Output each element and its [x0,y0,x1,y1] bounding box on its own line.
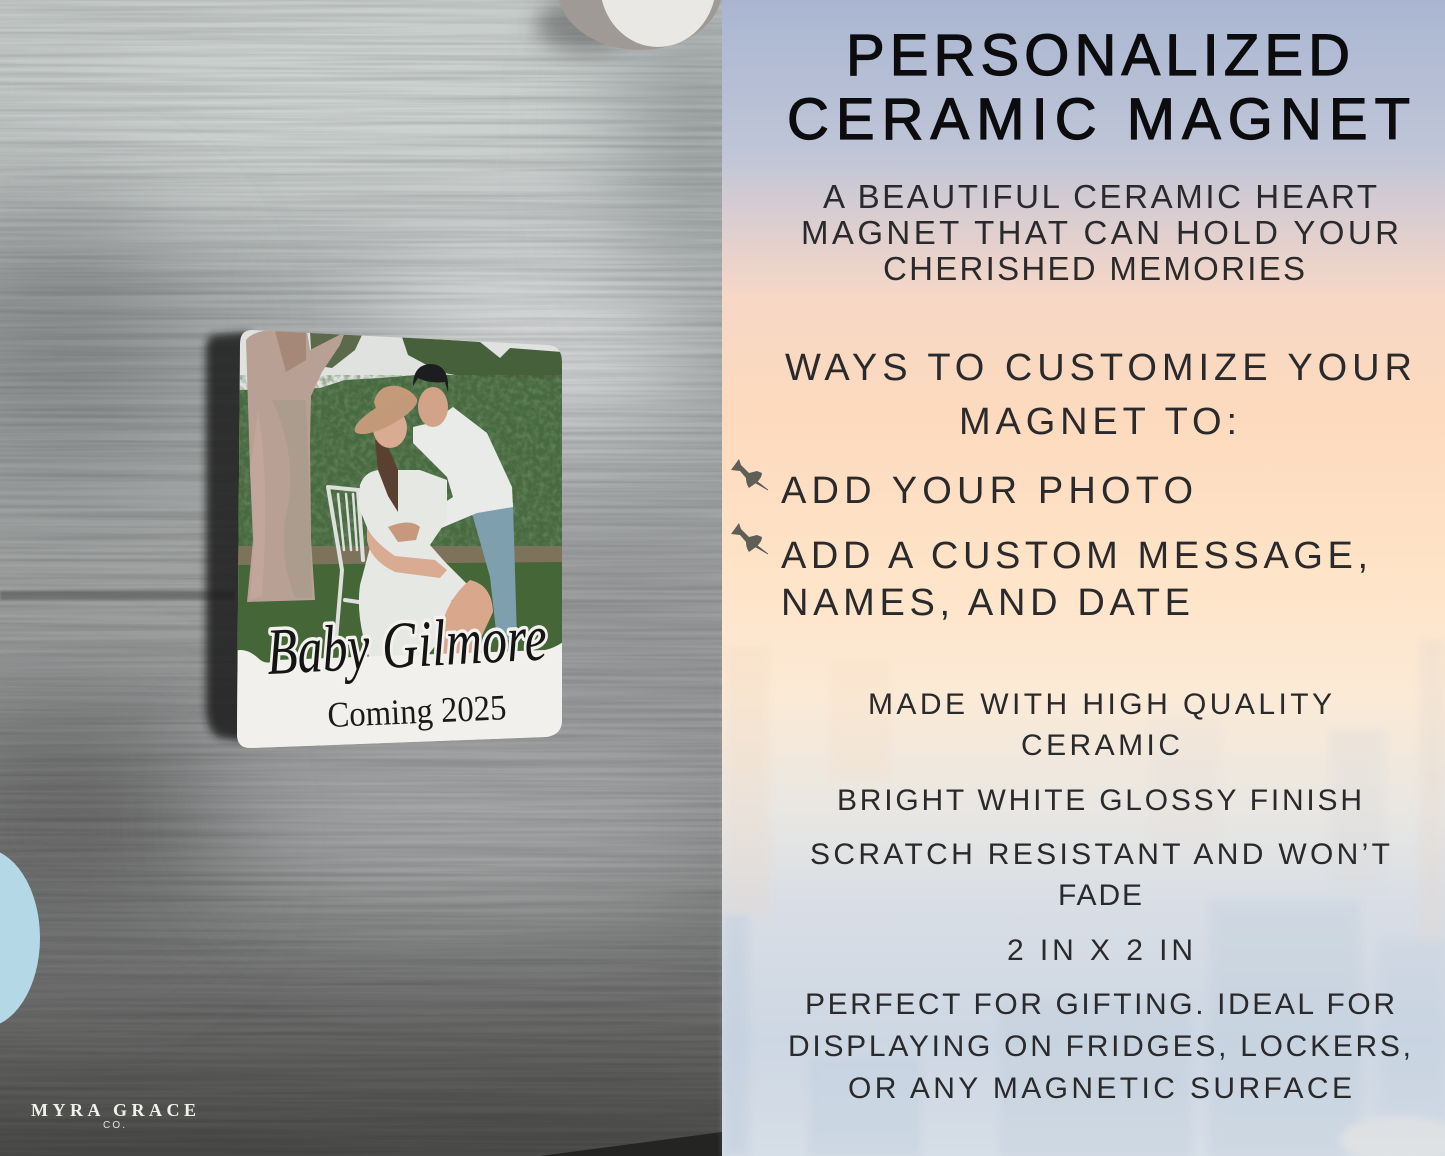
feature: high quality ceramic: CERAMIC [1021,729,1180,762]
photo: ground and grass [237,546,562,665]
photo: woman [350,386,493,665]
feature: perfect for gifting: DISPLAYING ON FRIDGES, LOCKERS, [788,1030,1411,1063]
magnet shadow [206,332,250,742]
background: faded skyline [724,640,1445,1156]
title: PERSONALIZED [846,23,1350,88]
photo: tree trunk [246,330,345,602]
feature: perfect for gifting [788,988,1411,1105]
feature: size: 2 IN X 2 IN [1007,934,1193,967]
panel: brushed steel fridge photo [0,0,760,1156]
magnet white caption area [232,640,566,752]
photo: upper foliage [310,332,562,384]
feature: scratch resistant [810,838,1390,912]
title: CERAMIC MAGNET [787,87,1410,152]
icon: white round magnet at top [535,0,722,51]
icon: pushpin 2 [731,523,768,554]
ceramic photo magnet [230,325,570,755]
photo: hedge [237,374,562,552]
subtitle: CHERISHED MEMORIES [883,250,1305,287]
bullet: add a custom message: ADD A CUSTOM MESSAGE, [781,535,1368,577]
heading: ways to customize [785,347,1412,443]
subtitle: A BEAUTIFUL CERAMIC HEART [823,178,1377,215]
heading: ways to customize: WAYS TO CUSTOMIZE YOUR [785,347,1412,389]
magnet text: Coming 2025: Coming 2025 [327,687,507,735]
bullet: add your photo: ADD YOUR PHOTO [781,470,1193,512]
heading: ways to customize: MAGNET TO: [959,401,1237,443]
photo: white chair [326,485,365,638]
feature: glossy finish: BRIGHT WHITE GLOSSY FINISH [837,784,1362,817]
subtitle [801,178,1399,287]
feature: high quality ceramic: MADE WITH HIGH QUALITY [868,688,1332,721]
feature: perfect for gifting: PERFECT FOR GIFTING. IDEAL FOR [805,988,1395,1021]
panel: pastel sky text panel [722,0,1445,1156]
title [787,23,1410,152]
feature: high quality ceramic [868,688,1332,762]
logo: Myra Grace Co.: CO. [103,1120,125,1131]
photo: man [413,364,517,640]
subtitle: MAGNET THAT CAN HOLD YOUR [801,214,1399,251]
logo: Myra Grace Co.: MYRA GRACE [31,1100,196,1120]
feature: scratch resistant: SCRATCH RESISTANT AND WON’T [810,838,1390,871]
feature: perfect for gifting: OR ANY MAGNETIC SURFACE [848,1072,1352,1105]
icon: pushpin 1 [731,459,768,490]
bullet: add a custom message: NAMES, AND DATE [781,582,1190,624]
icon: blue round magnet at left [0,848,40,1028]
bullet: add a custom message [781,535,1368,624]
magnet text: Baby Gilmore: Baby Gilmore [265,601,548,689]
feature: scratch resistant: FADE [1058,879,1142,912]
logo: Myra Grace Co. [31,1104,196,1128]
